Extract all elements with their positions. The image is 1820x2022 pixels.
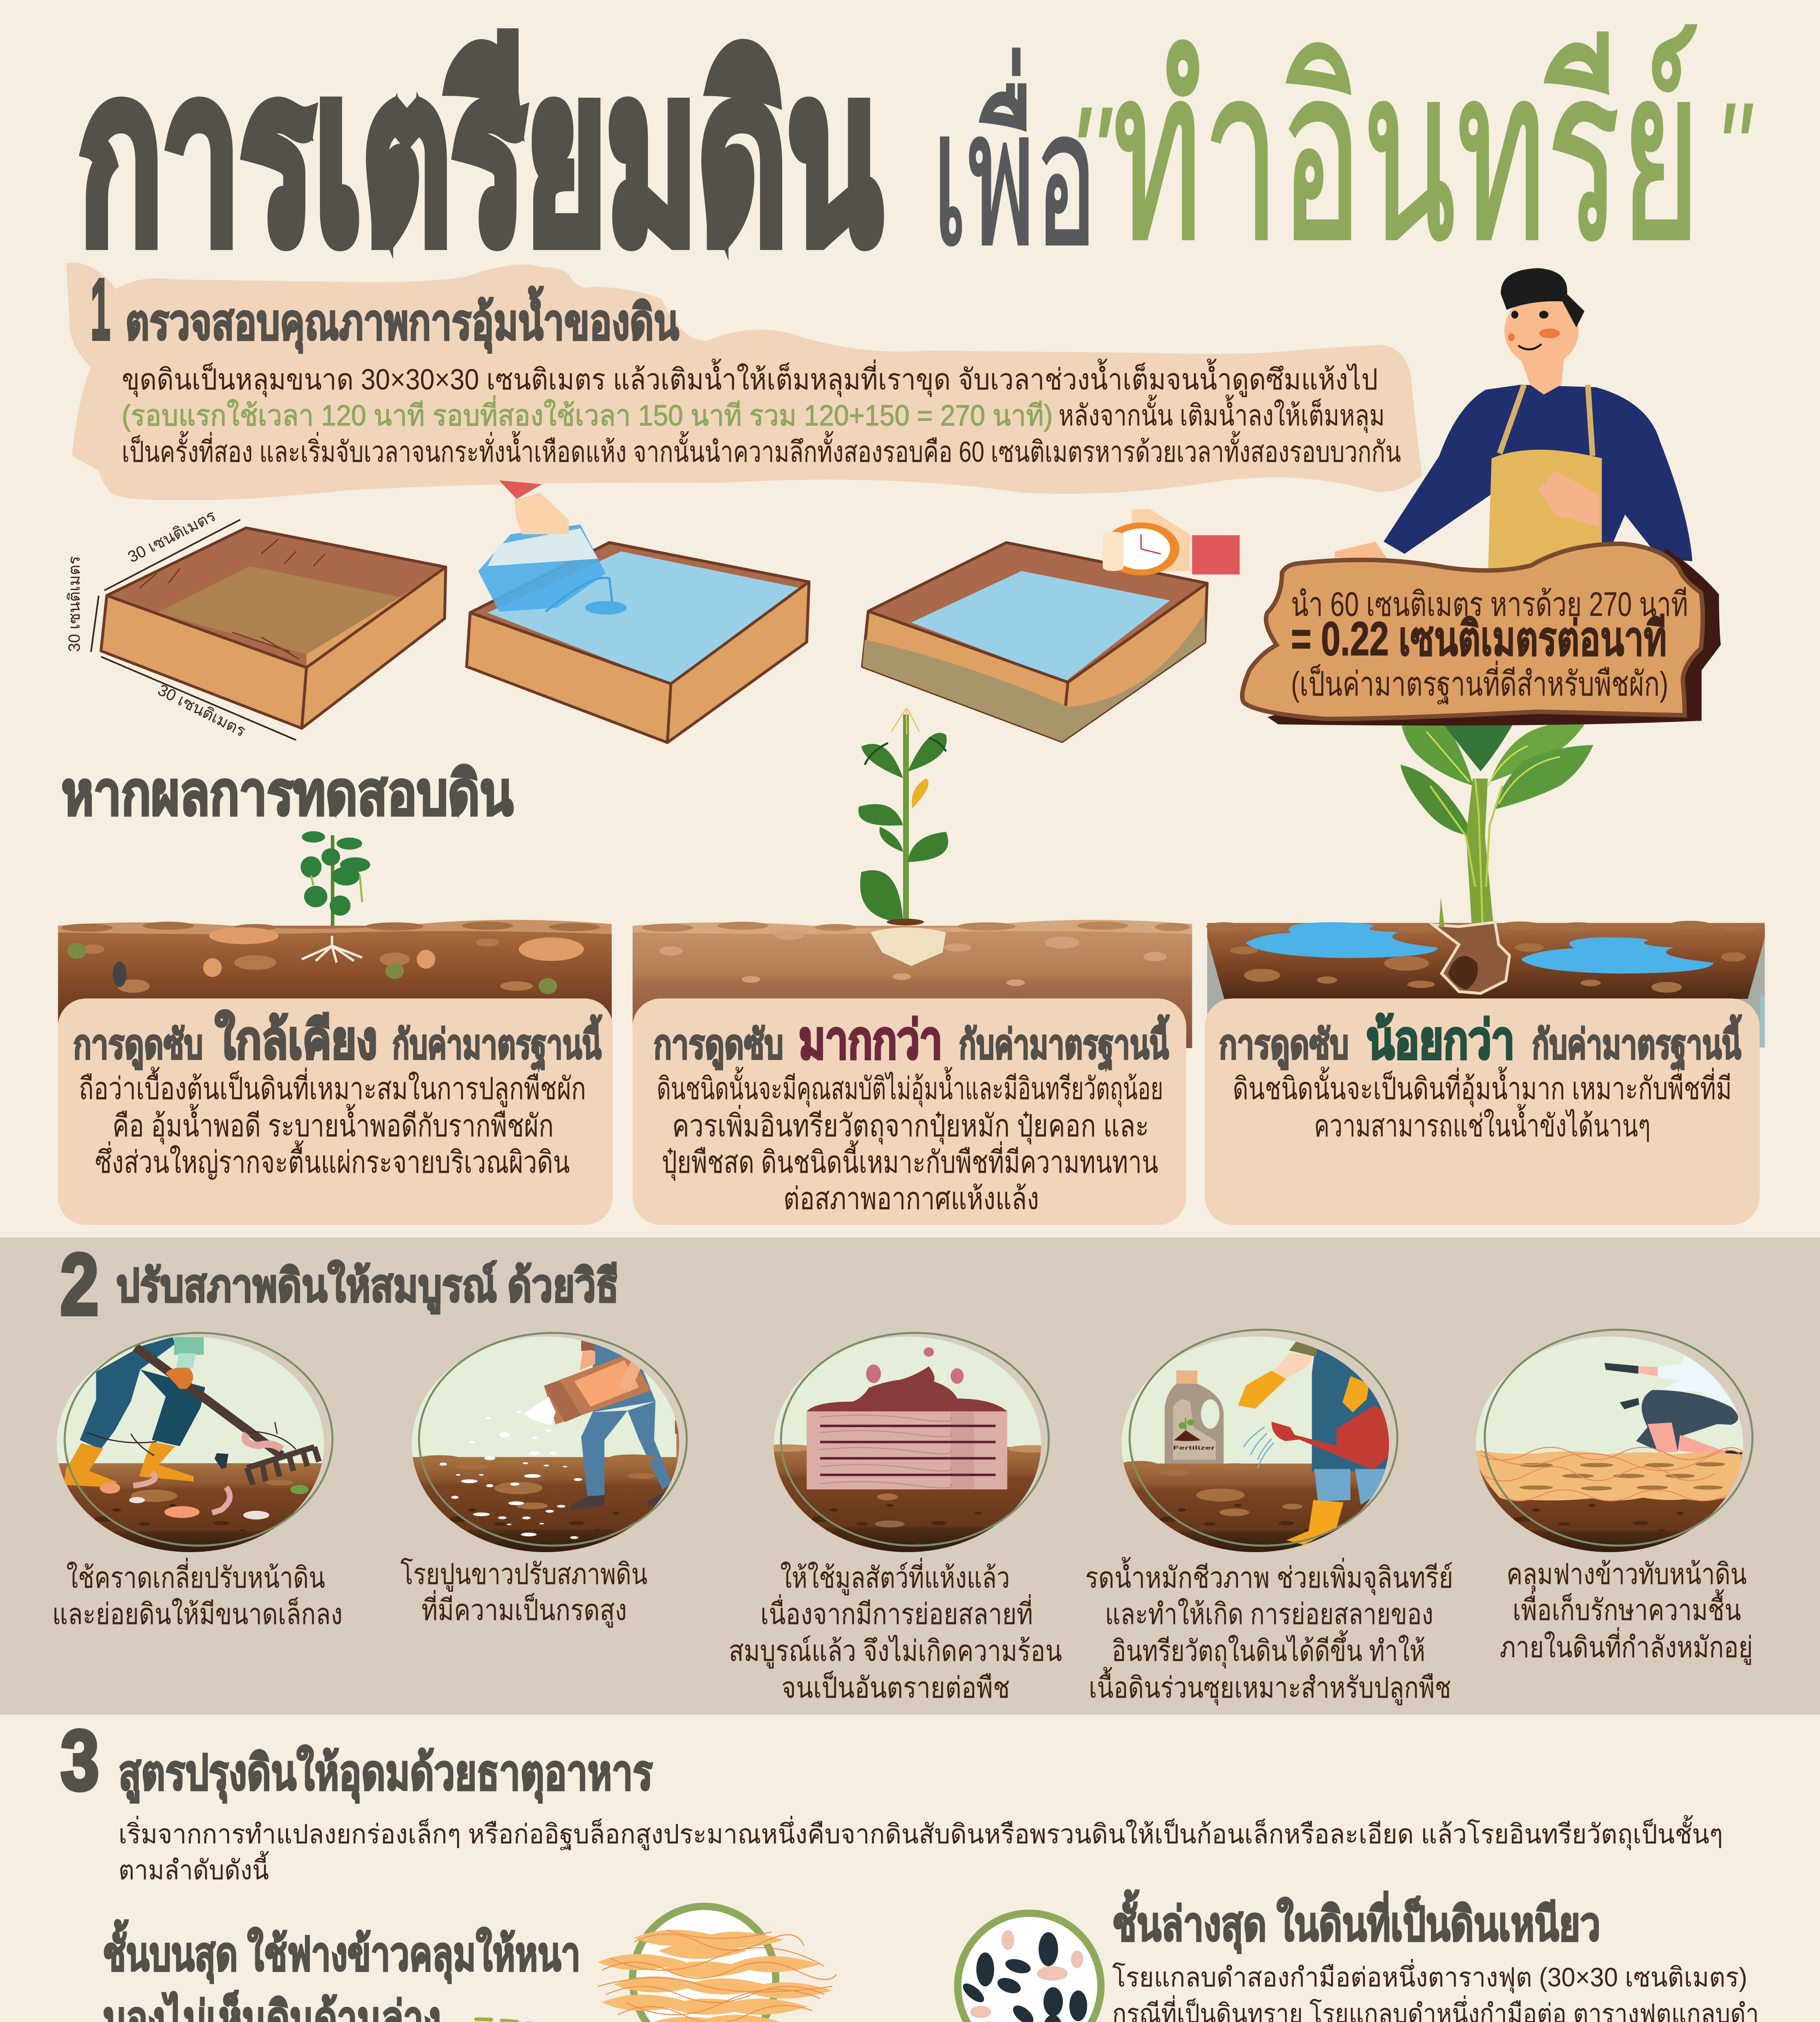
oval: bio-fermented liquid: Fertilizer xyxy=(1173,1445,1215,1451)
caption 4: และทำให้เกิด การย่อยสลายของ xyxy=(1105,1598,1433,1631)
title: " xyxy=(1068,78,1115,232)
result sign: = 0.22 เซนติเมตรต่อนาที xyxy=(1291,612,1667,666)
caption 3: เนื่องจากมีการย่อยสลายที่ xyxy=(760,1594,1033,1631)
dimension labels: 30 เซนติเมตร xyxy=(155,681,248,740)
card text: ต่อสภาพอากาศแห้งแล้ง xyxy=(783,1182,1039,1216)
caption 3: จนเป็นอันตรายต่อพืช xyxy=(781,1671,1010,1704)
card text xyxy=(1233,1066,1732,1143)
panel: step 1 xyxy=(66,260,1422,500)
card heading: การดูดซับ xyxy=(1219,1022,1349,1070)
caption 5: เพื่อเก็บรักษาความชื้น xyxy=(1513,1589,1741,1626)
caption 2: โรยปูนขาวปรับสภาพดิน xyxy=(400,1557,648,1592)
oval: straw mulch xyxy=(1476,1330,1752,1552)
card: close to standard: กับค่ามาตรฐานนี้ xyxy=(392,1015,602,1071)
root xyxy=(1433,922,1509,993)
card heading: การดูดซับ xyxy=(654,1022,783,1070)
card text: ซึ่งส่วนใหญ่รากจะตื้นแผ่กระจายบริเวณผิวดิน xyxy=(95,1140,570,1180)
icon: seeds circle xyxy=(958,1913,1101,2022)
captions for step 2 xyxy=(52,1557,1753,1705)
soil panel 3 xyxy=(1206,898,1765,1047)
intro text xyxy=(122,358,1401,468)
intro text: เป็นครั้งที่สอง และเริ่มจับเวลาจนกระทั่งน้ำเหือดแห้ง จากนั้นนำความลึกทั้งสองรอบคือ 60 เซนติเมตรหารด้วยเวลาทั้งสองรอบบวกกัน xyxy=(122,431,1401,468)
soil panel 2 xyxy=(633,919,1192,1048)
step 3 heading xyxy=(61,1713,653,1808)
card text: ความสามารถแช่ในน้ำขังได้นานๆ xyxy=(1314,1104,1651,1143)
result sign: (เป็นค่ามาตรฐานที่ดีสำหรับพืชผัก) xyxy=(1291,660,1668,704)
illustration: empty soil pit xyxy=(66,507,446,740)
card text xyxy=(79,1066,586,1180)
card text: ควรเพิ่มอินทรียวัตถุจากปุ๋ยหมัก ปุ๋ยคอก และ xyxy=(672,1105,1149,1144)
icon: straw circle xyxy=(598,1906,836,2022)
title: เพื่อ xyxy=(932,48,1097,285)
bottom layer text: ชั้นล่างสุด ในดินที่เป็นดินเหนียว xyxy=(1112,1890,1600,1953)
illustration: farmer xyxy=(1335,268,1692,569)
farmer xyxy=(1312,1345,1392,1471)
step 3 intro text: ตามลำดับดังนี้ xyxy=(119,1851,269,1885)
fertilizer bottle xyxy=(1165,1371,1224,1464)
caption 3: ให้ใช้มูลสัตว์ที่แห้งแล้ว xyxy=(780,1558,1010,1595)
step 3 intro text: เริ่มจากการทำแปลงยกร่องเล็กๆ หรือก่ออิฐบล็อกสูงประมาณหนึ่งคืบจากดินสับดินหรือพรวนดินให้เป็นก้อนเล็กหรือละเอียด แล้วโรยอินทรียวัตถุเป็นชั้นๆ xyxy=(119,1815,1723,1851)
heading: soil test results: หากผลการทดสอบดิน xyxy=(61,759,513,827)
step 3 heading: 3 xyxy=(61,1713,99,1808)
straw mat xyxy=(1476,1451,1745,1501)
heading: ตรวจสอบคุณภาพการอุ้มน้ำของดิน xyxy=(125,286,679,353)
step 3 heading: สูตรปรุงดินให้อุดมด้วยธาตุอาหาร xyxy=(119,1745,653,1803)
card text xyxy=(657,1066,1163,1216)
hand and sleeve xyxy=(499,480,542,499)
dimension labels xyxy=(66,507,248,740)
roots xyxy=(302,936,362,962)
step 2 heading: 2 xyxy=(60,1235,99,1333)
caption 3: สมบูรณ์แล้ว จึงไม่เกิดความร้อน xyxy=(729,1635,1062,1669)
intro text: ขุดดินเป็นหลุมขนาด 30×30×30 เซนติเมตร แล้วเติมน้ำให้เต็มหลุมที่เราขุด จับเวลาช่วงน้ำเต็มจนน้ำดูดซึมแห้งไป xyxy=(122,358,1378,397)
step 2 heading: ปรับสภาพดินให้สมบูรณ์ ด้วยวิธี xyxy=(116,1260,619,1314)
dimension labels: 30 เซนติเมตร xyxy=(66,556,83,652)
illustration: drained pit and stopwatch xyxy=(862,509,1240,742)
caption 5: คลุมฟางข้าวทับหน้าดิน xyxy=(1507,1558,1747,1592)
caption 4: อินทรียวัตถุในดินได้ดีขึ้น ทำให้ xyxy=(1112,1630,1425,1669)
oval: bio-fermented liquid xyxy=(1121,1330,1397,1552)
caption 4: เนื้อดินร่วนซุยเหมาะสำหรับปลูกพืช xyxy=(1089,1667,1451,1705)
bottom layer text: โรยแกลบดำสองกำมือต่อหนึ่งตารางฟุต (30×30 เซนติเมตร) xyxy=(1112,1959,1747,1994)
caption 4: รดน้ำหมักชีวภาพ ช่วยเพิ่มจุลินทรีย์ xyxy=(1085,1557,1453,1595)
caption 2 xyxy=(400,1557,648,1628)
caption 1 xyxy=(52,1558,343,1631)
result sign xyxy=(1242,544,1721,725)
icon: water jug xyxy=(478,480,627,615)
result sign: นำ 60 เซนติเมตร หารด้วย 270 นาที xyxy=(1291,585,1688,623)
card: more than standard: มากกว่า xyxy=(799,1011,942,1070)
oval: dried manure crate xyxy=(758,1333,1055,1552)
bottom layer text xyxy=(1112,1890,1759,2022)
card text: ถือว่าเบื้องต้นเป็นดินที่เหมาะสมในการปลูกพืชผัก xyxy=(79,1066,586,1107)
step 3 intro text xyxy=(119,1815,1723,1885)
card: more than standard: กับค่ามาตรฐานนี้ xyxy=(959,1015,1170,1071)
caption 2: ที่มีความเป็นกรดสูง xyxy=(421,1590,627,1628)
dashed connector lines xyxy=(258,2019,1188,2022)
caption 3 xyxy=(729,1558,1062,1704)
caption 1: และย่อยดินให้มีขนาดเล็กลง xyxy=(52,1597,343,1631)
dimension labels: 30 เซนติเมตร xyxy=(125,507,218,566)
peach blob background xyxy=(66,263,1422,500)
panel: step 2 band xyxy=(0,1237,1820,1715)
card: close to standard xyxy=(58,998,613,1225)
caption 5: ภายในดินที่กำลังหมักอยู่ xyxy=(1500,1627,1753,1665)
top layer text xyxy=(103,1920,580,2022)
illustration: corn plant xyxy=(858,708,948,922)
title: " xyxy=(1715,74,1754,228)
water ponds xyxy=(1246,922,1438,958)
card: less than standard xyxy=(1205,998,1760,1225)
top layer text: ชั้นบนสุด ใช้ฟางข้าวคลุมให้หนา xyxy=(103,1920,580,1983)
illustration: banana plant xyxy=(1401,717,1593,923)
icon: stopwatch in hand xyxy=(1103,509,1240,575)
panel: step 1: 1 xyxy=(91,260,110,358)
card: less than standard: น้อยกว่า xyxy=(1366,1011,1515,1070)
step 2 heading xyxy=(60,1235,619,1333)
caption 1: ใช้คราดเกลี่ยปรับหน้าดิน xyxy=(66,1558,325,1594)
card heading: การดูดซับ xyxy=(73,1022,203,1070)
card text: ปุ๋ยพืชสด ดินชนิดนี้เหมาะกับพืชที่มีความทนทาน xyxy=(662,1140,1158,1181)
intro text: (รอบแรกใช้เวลา 120 นาที รอบที่สองใช้เวลา 150 นาที รวม 120+150 = 270 นาที) xyxy=(122,396,1053,432)
intro text: หลังจากนั้น เติมน้ำลงให้เต็มหลุม xyxy=(1058,394,1385,433)
card: more than standard xyxy=(633,998,1186,1225)
card: close to standard: ใกล้เคียง xyxy=(215,1010,377,1070)
soil panel 1 xyxy=(58,920,612,1048)
illustration: pit filled with water and jug xyxy=(467,480,809,742)
title: การเตรียมดิน xyxy=(79,25,882,291)
illustration: bean plant xyxy=(301,831,370,936)
caption 5 xyxy=(1500,1558,1753,1665)
card text: ดินชนิดนั้นจะมีคุณสมบัติไม่อุ้มน้ำและมีอินทรียวัตถุน้อย xyxy=(657,1066,1163,1107)
oval: sprinkling lime xyxy=(412,1333,688,1552)
caption 4 xyxy=(1085,1557,1453,1705)
card text: คือ อุ้มน้ำพอดี ระบายน้ำพอดีกับรากพืชผัก xyxy=(112,1104,554,1144)
oval: raking soil xyxy=(57,1333,332,1552)
